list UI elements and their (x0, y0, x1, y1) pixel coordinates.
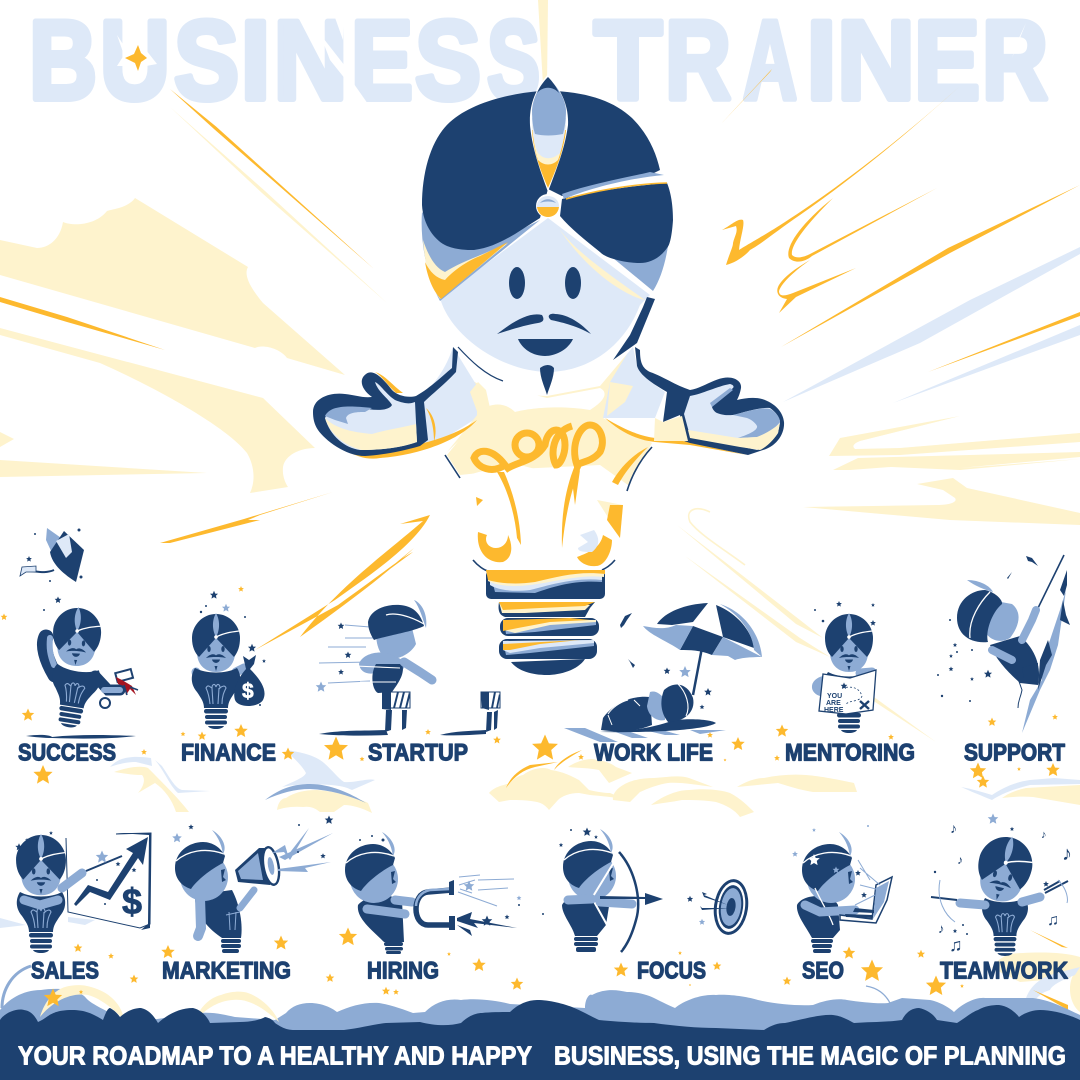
teamwork: music notes: ♪ (938, 921, 944, 936)
genie: turban navy lower right (560, 183, 673, 263)
title: BUSINESS TRAINER: N (274, 0, 348, 123)
genie: filament stems (497, 465, 582, 548)
genie: left cuff sliver orange (320, 420, 477, 459)
mentoring: map (819, 670, 876, 714)
title: BUSINESS TRAINER: R (982, 0, 1048, 123)
focus: head (563, 829, 616, 900)
mentoring: stars (814, 601, 876, 626)
rays: pale blue right (783, 247, 1080, 403)
mentoring: map: YOU (827, 693, 842, 700)
sales: head (16, 834, 66, 895)
title: BUSINESS TRAINER: S (487, 0, 540, 123)
success: shadow (26, 735, 136, 739)
genie: turban band orange (566, 183, 667, 199)
hiring: bolts (457, 912, 517, 940)
seo: screw (811, 939, 833, 953)
focus: bowstring (592, 854, 621, 950)
label: FINANCE: FINANCE (181, 740, 276, 766)
work life: face (647, 691, 666, 720)
genie: right arm (603, 347, 665, 418)
label: SUCCESS: SUCCESS (18, 740, 116, 766)
startup: shoulder (359, 652, 407, 675)
title: BUSINESS TRAINER: U (100, 0, 170, 123)
teamwork: arms (960, 897, 1040, 905)
mentoring: arm (816, 672, 872, 692)
label: MENTORING: MENTORING (785, 740, 915, 766)
support: rope (1015, 555, 1064, 655)
success: arm with diploma (95, 676, 120, 690)
genie: neck cream strip (447, 382, 633, 452)
title: BUSINESS TRAINER: E (914, 0, 980, 123)
genie: screw ring 2 (500, 618, 599, 636)
character: marketing (172, 816, 333, 953)
genie: turban shade left (422, 212, 540, 301)
seo: screen rays (855, 860, 880, 905)
marketing: filament (226, 912, 240, 930)
focus: target arrows (700, 892, 730, 910)
genie: turban cream left (423, 240, 508, 299)
title: BUSINESS TRAINER: R (665, 0, 731, 123)
character: focus (542, 828, 752, 952)
startup: body stripes (355, 666, 400, 682)
cloud: centre cream (277, 790, 372, 813)
sales: body (17, 892, 65, 953)
genie: base plate (486, 570, 605, 599)
hiring: magnet (416, 880, 455, 930)
finance: head (192, 613, 240, 672)
support: arm (992, 610, 1036, 660)
work life: turban (661, 684, 693, 722)
focus: bow (619, 852, 638, 952)
label: SEO: SEO (802, 958, 844, 984)
genie: feather blue (532, 78, 566, 136)
work life: reclining body (601, 697, 652, 731)
character: support (937, 555, 1070, 733)
title: BUSINESS TRAINER: S (415, 0, 481, 123)
marketing: body (195, 890, 242, 938)
sales: pointer (86, 856, 122, 871)
genie: collar lines (458, 347, 503, 381)
footer tagline left: YOUR ROADMAP TO A HEALTHY AND HAPPY (18, 1040, 532, 1070)
title slashes and sparkle (117, 0, 1026, 104)
seo: earphone (815, 888, 833, 925)
genie: feather cream (532, 125, 566, 164)
mentoring: base (825, 672, 873, 733)
character: sales (15, 831, 151, 953)
genie: feather orange (532, 130, 566, 188)
genie: left mitten outline (313, 347, 458, 456)
marketing: stars (172, 816, 333, 858)
genie: feather (530, 74, 568, 192)
title: BUSINESS TRAINER (29, 0, 1048, 123)
genie: bulb right orange shard (597, 500, 623, 536)
genie: right mitten outline (635, 347, 784, 455)
rays: orange swirls right (720, 69, 1080, 372)
genie: torso cream (447, 354, 652, 485)
work life: umbrella canopy blue panels (643, 604, 762, 660)
character: startup (316, 600, 500, 736)
character: seo (792, 825, 892, 953)
gold stars (1, 586, 1060, 995)
hiring: body (358, 896, 404, 942)
genie: eyes (509, 267, 581, 299)
focus: stars (542, 828, 705, 925)
genie: left mitten mid shade (325, 407, 372, 424)
cloud: left cream swoop (114, 767, 189, 812)
genie: moustache (497, 314, 591, 334)
focus: arms (568, 899, 632, 904)
genie: turban orange left (425, 242, 508, 299)
genie: feather pale (532, 118, 566, 158)
label: FOCUS: FOCUS (637, 958, 706, 984)
genie: pearl (536, 194, 560, 218)
genie: turban shade right (562, 216, 668, 291)
rays: cream clouds left (0, 107, 387, 493)
genie: right mitten mid shade (710, 388, 780, 438)
support: screw base (1022, 663, 1038, 684)
genie: right mitten orange edge (605, 418, 747, 455)
genie: feather tip (537, 77, 559, 93)
success: raised arm (44, 637, 55, 675)
genie: right mitten fill (684, 384, 780, 450)
bottom star on cream arc (44, 988, 83, 1006)
genie: right mitten cream (688, 423, 780, 450)
label: WORK LIFE: WORK LIFE (594, 740, 713, 766)
cloud: thin arc left (2, 966, 31, 1008)
support: feather (967, 580, 993, 592)
graduation cap (20, 528, 84, 611)
hiring: screw (384, 942, 403, 954)
hiring: head (345, 832, 398, 903)
startup: speed lines (319, 625, 375, 683)
teamwork: music notes: ♫ (1047, 912, 1059, 929)
title: BUSINESS TRAINER: S (174, 0, 239, 123)
support: cliff dark (1038, 570, 1070, 690)
character: teamwork (931, 814, 1072, 956)
label: HIRING: HIRING (367, 958, 439, 984)
finance: stars (200, 591, 266, 706)
seo: body (797, 896, 840, 938)
startup: face (376, 628, 416, 659)
title: BUSINESS TRAINER: I (806, 0, 836, 123)
cloud: left edge pale (0, 917, 95, 928)
marketing: right arm (240, 890, 254, 908)
cloud: mid blue bottom layer (0, 989, 1080, 1040)
seo: head (802, 832, 855, 903)
finance: dollar sign: $ (242, 680, 254, 703)
sales: chart board (66, 833, 151, 930)
mentoring: head (825, 613, 873, 672)
support: cliff (1022, 590, 1066, 733)
label: MARKETING: MARKETING (162, 958, 291, 984)
genie: face (440, 218, 650, 372)
character: success (26, 606, 138, 739)
focus: body (562, 894, 610, 936)
marketing: screw (221, 939, 241, 953)
marketing: megaphone (235, 846, 282, 886)
startup: torso (372, 664, 403, 693)
title: BUSINESS TRAINER: T (594, 0, 662, 123)
support: loose rope (1015, 670, 1022, 708)
cloud arc: thin blue near SEO (866, 986, 893, 1010)
teamwork: music notes: ♪ (957, 853, 963, 867)
label: SALES: SALES (31, 958, 99, 984)
character: hiring (345, 832, 521, 954)
genie: left mitten fill (325, 382, 417, 450)
seo: laptop (840, 877, 892, 923)
title: BUSINESS TRAINER: B (29, 0, 97, 123)
cloud: left pale swoop (110, 757, 210, 793)
cloud: centre pale peak (282, 750, 375, 790)
title: BUSINESS TRAINER: N (837, 0, 915, 123)
teamwork: head (970, 830, 1038, 907)
rays: cream clouds right (677, 416, 1080, 742)
focus: arrow (600, 893, 663, 905)
cloud: right cream mass (489, 759, 857, 817)
teamwork: body (982, 898, 1028, 956)
genie: turban navy left (422, 91, 548, 250)
genie: turban cream right (556, 224, 645, 300)
genie: bulb glass white (460, 465, 628, 568)
success: body (45, 663, 102, 731)
teamwork: motion arcs (939, 880, 1067, 922)
teamwork: music notes: ♪ (950, 820, 957, 836)
genie: screw ring 1 (499, 602, 595, 617)
cloud: navy footer band (0, 1000, 1080, 1080)
genie: left arm (415, 347, 477, 445)
mentoring: map: HERE (824, 707, 844, 714)
cloud: far right cream (1002, 785, 1080, 805)
genie: turban navy top right (548, 91, 660, 196)
corner decoration: right dome and rays (992, 930, 1080, 1012)
genie: collar right navy wedge (613, 297, 655, 360)
work life: towel (564, 728, 726, 742)
cloud: far right pale arc (961, 778, 1080, 800)
teamwork: music notes (938, 820, 1072, 955)
teamwork: music notes: ♪ (1062, 843, 1072, 865)
work life: body highlights (608, 700, 640, 725)
genie: screw ring 3 (499, 639, 597, 659)
genie: left arm orange edge (375, 372, 436, 442)
genie: right cuff cream (654, 416, 688, 441)
startup: shadows (319, 730, 486, 736)
sales: dollar sign: $ (122, 881, 142, 922)
startup: hurdle two (481, 692, 500, 732)
work life: shadow (600, 719, 716, 732)
seo: stars (792, 825, 869, 898)
teamwork: batons (931, 881, 1068, 900)
focus: target (710, 877, 752, 937)
startup: hurdle one (382, 692, 410, 732)
cloud: centre blue arc (265, 784, 366, 803)
genie: goatee (540, 365, 554, 395)
label: SUPPORT: SUPPORT (964, 740, 1065, 766)
hiring: magnetic lines pale (458, 875, 514, 906)
marketing: left arm (198, 898, 201, 936)
startup: feather (414, 600, 426, 628)
rays: orange lower left (255, 515, 430, 650)
genie: base tip (511, 659, 585, 675)
genie: filament loops (474, 425, 602, 470)
finance: body (192, 668, 240, 729)
genie: bulb left bowl (476, 497, 511, 562)
work life: umbrella canopy navy top panels (657, 603, 754, 655)
success: diploma (100, 669, 138, 708)
finance: arms (196, 668, 244, 685)
cream arcs on bottom clouds (40, 985, 279, 1023)
work life: stars and birds (620, 613, 712, 709)
teamwork: music notes: ♫ (949, 935, 962, 955)
startup: outstretched arm (404, 662, 432, 680)
genie: bulb sides navy (445, 447, 652, 571)
teamwork: stars (934, 814, 1049, 935)
main genie (313, 74, 784, 675)
genie: bulb right orange shard 2 (607, 447, 648, 538)
sales: stars (15, 831, 136, 905)
marketing: head (175, 830, 228, 901)
rays: orange streaks left (0, 89, 374, 543)
character: work life (564, 603, 762, 742)
teamwork: music notes: ♪ (1041, 829, 1046, 841)
character: mentoring (814, 601, 876, 733)
support: body (990, 636, 1039, 685)
genie: bulb right bowl (577, 535, 612, 566)
finance: money bag (234, 655, 265, 706)
genie: base plate colours (486, 570, 605, 593)
seo: arm (805, 905, 855, 912)
marketing: sound bolts (272, 828, 333, 872)
label: TEAMWORK: TEAMWORK (940, 958, 1069, 984)
cloud: right orange arcs (506, 750, 582, 788)
startup: speed stars (316, 622, 351, 692)
sales: growth arrow (74, 837, 148, 906)
sales: arms (24, 873, 82, 905)
mentoring: map: ARE (826, 700, 841, 707)
title: BUSINESS TRAINER: E (351, 0, 413, 123)
seo: turban stars (808, 854, 839, 873)
genie: bulb right pale (578, 530, 598, 552)
support: stars and birds (937, 556, 1038, 702)
hiring: arm (367, 900, 412, 914)
support: turban (957, 590, 1002, 642)
startup: turban (368, 605, 424, 640)
title: BUSINESS TRAINER: I (240, 0, 270, 123)
success: head (51, 606, 102, 667)
label: STARTUP: STARTUP (368, 740, 468, 766)
clouds: middle band (0, 750, 1080, 928)
genie: left mitten cream (325, 418, 417, 450)
support: face (985, 600, 1019, 641)
genie: white chest patch (477, 380, 605, 412)
character: finance (192, 591, 266, 729)
genie: mouth (518, 339, 573, 356)
focus: screw (574, 937, 598, 952)
work life: umbrella pole (693, 637, 704, 695)
genie: turban band highlight (562, 172, 664, 199)
hiring: stars (359, 835, 521, 926)
ray: cream loop lower right (689, 509, 745, 565)
title: BUSINESS TRAINER: A (743, 0, 797, 123)
